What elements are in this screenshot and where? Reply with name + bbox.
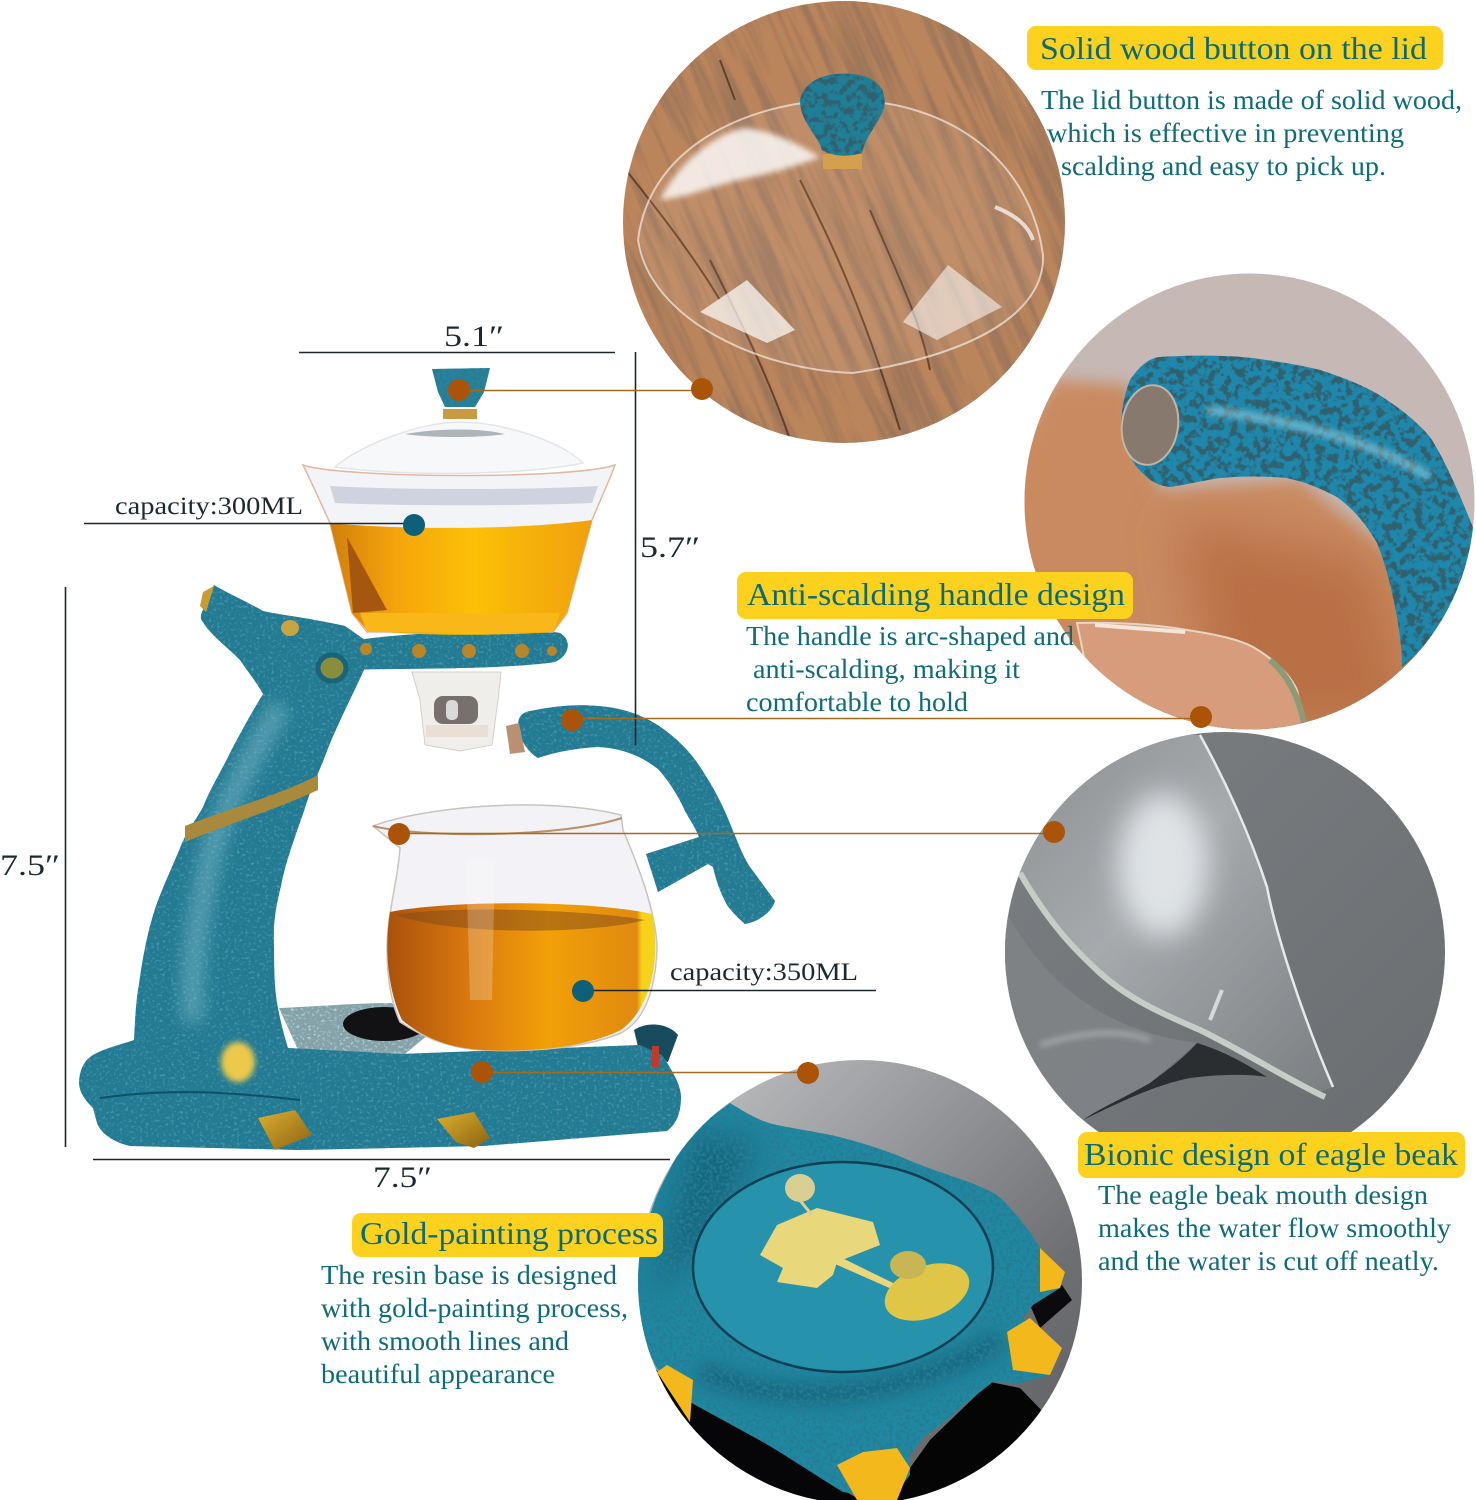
callout: eagle beak	[1078, 1132, 1465, 1276]
callout: anti-scalding handle: Anti-scalding handle design	[747, 576, 1125, 612]
dimension label: height: 5.7″	[640, 531, 700, 564]
icon: infuser valve	[412, 672, 501, 751]
icon: gold lotus	[760, 1174, 977, 1331]
panel: eagle beak spout photo	[1005, 732, 1445, 1132]
dimension label: total width: 7.5″	[373, 1161, 432, 1194]
callout: solid wood button: Solid wood button on the lid	[1040, 30, 1427, 66]
panel: lid close-up photo	[623, 1, 1065, 443]
icon: handle arc	[1110, 345, 1476, 675]
icon: glass lid	[335, 366, 583, 473]
callout leader lines and dots	[388, 378, 1212, 1084]
dimension lines	[66, 352, 876, 1160]
callout: gold-painting process: with gold-painting process,	[321, 1293, 628, 1323]
dimension label: total height: 7.5″	[0, 849, 60, 882]
callout: gold-painting process: Gold-painting process	[360, 1215, 658, 1251]
illustration: deer tea set	[70, 366, 790, 1160]
icon: glass pitcher with tea	[373, 805, 657, 1051]
icon: glass rim	[1077, 623, 1307, 735]
callout: eagle beak: and the water is cut off neatly.	[1098, 1246, 1439, 1276]
callout: gold-painting process: The resin base is designed	[321, 1260, 618, 1290]
label: cup capacity: capacity:300ML	[115, 493, 303, 520]
icon: teal base plate	[630, 1100, 1070, 1500]
dimension label: lid width: 5.1″	[444, 320, 504, 353]
icon: gold feet	[657, 1248, 1065, 1500]
icon: glass dome	[638, 100, 1043, 373]
callout: eagle beak: The eagle beak mouth design	[1098, 1180, 1429, 1210]
icon: gold studs on tray	[360, 643, 557, 658]
label: pitcher capacity: capacity:350ML	[670, 959, 858, 986]
callout: anti-scalding handle	[737, 572, 1133, 717]
callout: gold-painting process: with smooth lines and	[321, 1326, 570, 1356]
callout: solid wood button: which is effective in preventing	[1047, 118, 1404, 148]
icon: glass cup with tea	[303, 465, 615, 635]
callout: solid wood button: The lid button is made of solid wood,	[1041, 85, 1462, 115]
callout: eagle beak: Bionic design of eagle beak	[1084, 1136, 1458, 1172]
callout: anti-scalding handle: The handle is arc-shaped and	[746, 621, 1075, 651]
callout: gold-painting process	[321, 1213, 663, 1389]
callout: eagle beak: makes the water flow smoothly	[1098, 1213, 1452, 1243]
callout: solid wood button	[1027, 26, 1462, 181]
icon: gold collar	[185, 775, 318, 842]
icon: deer stand and handle	[70, 580, 790, 1160]
panel: handle close-up photo	[1024, 274, 1474, 730]
icon: grey plate and cup well	[275, 1000, 678, 1062]
callout: anti-scalding handle: comfortable to hold	[746, 687, 969, 717]
panel: gold-painted base photo	[625, 1055, 1090, 1500]
icon: lid knob	[800, 74, 885, 169]
callout: anti-scalding handle: anti-scalding, making it	[753, 654, 1021, 684]
callout: solid wood button: scalding and easy to pick up.	[1061, 151, 1386, 181]
callout: gold-painting process: beautiful appearance	[321, 1359, 555, 1389]
